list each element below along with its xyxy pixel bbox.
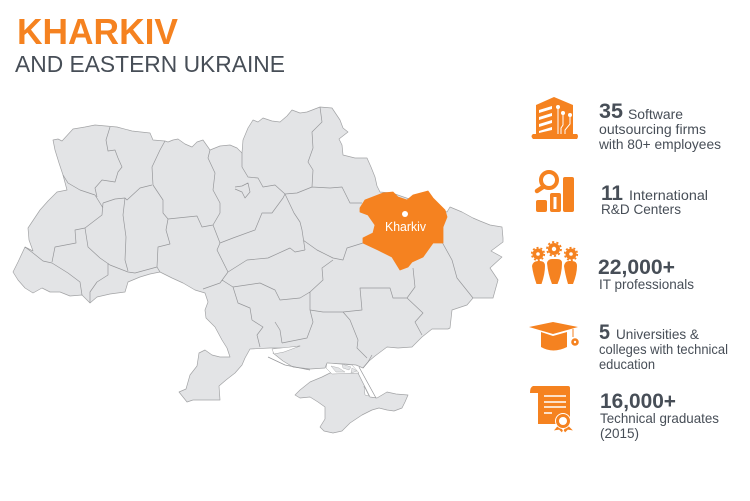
icon: office building [532, 97, 578, 139]
Sivash lagoon [272, 346, 369, 396]
region borders [25, 107, 473, 398]
stat: universities [529, 321, 728, 372]
title [15, 11, 285, 77]
Kharkiv region [360, 191, 447, 270]
Crimea [295, 372, 408, 433]
icon: people with gears [532, 242, 577, 284]
text: R&D centers [601, 182, 708, 217]
text: IT professionals: 22,000+ [598, 256, 675, 279]
text: software firms: with 80+ employees [598, 136, 721, 152]
text: IT professionals [598, 256, 694, 292]
title: AND EASTERN UKRAINE [15, 51, 285, 77]
text: universities: 5 [599, 321, 610, 344]
stat: IT professionals [532, 242, 694, 292]
text: R&D centers: R&D Centers [601, 201, 681, 217]
text: software firms: outsourcing firms [599, 121, 706, 137]
text: IT professionals: IT professionals [599, 276, 694, 292]
text: software firms [598, 100, 721, 152]
Kharkiv label: Kharkiv [385, 219, 426, 234]
text: graduates [600, 390, 719, 441]
text: software firms: Software [628, 106, 683, 122]
text: universities: education [599, 356, 655, 372]
stat: graduates [530, 386, 719, 441]
stat: software firms [532, 97, 721, 152]
icon: diploma with medal [530, 386, 574, 433]
icon: graduation cap [529, 322, 579, 350]
text: universities: Universities & [616, 326, 700, 342]
text: R&D centers: International [629, 187, 708, 203]
text: graduates: Technical graduates [600, 410, 719, 426]
title: KHARKIV [17, 11, 178, 52]
stat: R&D centers [536, 172, 708, 217]
map of Ukraine [13, 107, 503, 433]
text: universities [599, 321, 728, 372]
text: universities: colleges with technical [599, 341, 728, 357]
text: graduates: (2015) [600, 425, 639, 441]
icon: magnifier and bars [536, 172, 574, 212]
text: R&D centers: 11 [601, 182, 623, 205]
text: graduates: 16,000+ [600, 390, 676, 413]
mainland regions [13, 107, 503, 402]
text: software firms: 35 [599, 100, 623, 123]
Kharkiv city dot [402, 211, 408, 217]
Sivash islands [331, 364, 357, 373]
